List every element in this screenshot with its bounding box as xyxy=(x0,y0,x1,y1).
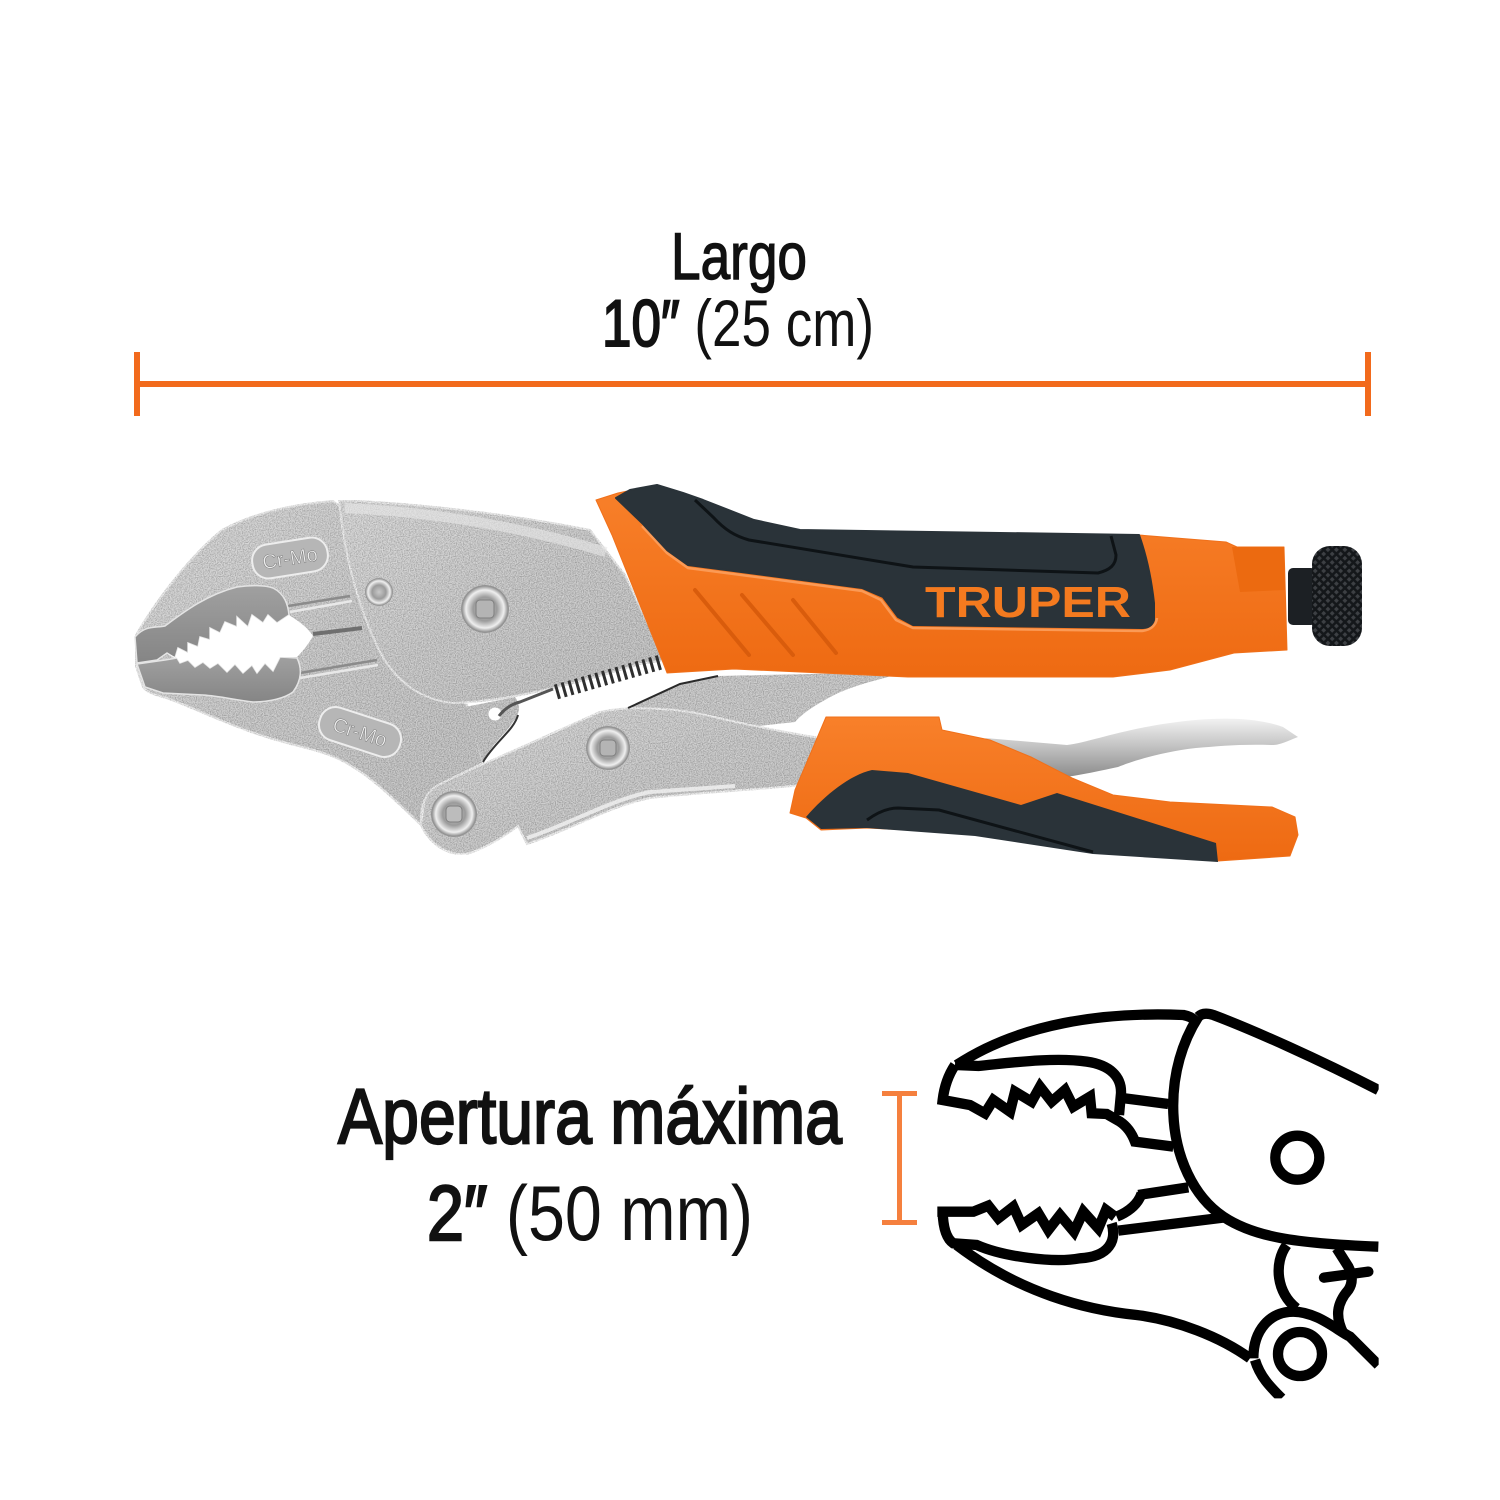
upper jaw insert xyxy=(135,586,289,663)
link dark edge xyxy=(483,715,518,762)
adjusting screw knob xyxy=(1288,546,1362,646)
handle groove line xyxy=(695,500,1116,573)
rivet: lever middle xyxy=(586,726,630,770)
orange handle body xyxy=(596,485,1287,677)
rear lever tip xyxy=(985,719,1298,778)
stamp: Cr-Mo lower xyxy=(315,703,405,761)
opening label xyxy=(338,1072,843,1257)
handle dark grip highlight rim xyxy=(642,526,1157,631)
orange lower grip xyxy=(790,717,1298,861)
lower jaw insert xyxy=(137,657,300,702)
lower grip xyxy=(790,717,1298,862)
jaw slide slots xyxy=(288,596,378,678)
length dimension line xyxy=(134,352,1371,416)
dark lower grip xyxy=(806,770,1218,862)
label: 2 inch (50 mm): 2″ (50 mm) xyxy=(427,1169,753,1257)
brand name: TRUPER xyxy=(925,578,1131,627)
product photo: locking pliers xyxy=(135,485,1362,862)
jaw frame xyxy=(135,501,483,825)
body plate highlight xyxy=(345,508,606,552)
stamp: Cr-Mo upper xyxy=(250,535,330,581)
opening dimension bracket xyxy=(882,1091,917,1225)
lower lever xyxy=(421,708,820,854)
icon: pliers jaw line drawing xyxy=(937,1014,1378,1398)
label: Largo: Largo xyxy=(671,219,807,293)
main handle xyxy=(596,485,1287,677)
lever lower highlight xyxy=(527,786,735,838)
jaw opening xyxy=(167,615,313,673)
lower grip groove xyxy=(867,808,1093,852)
wedge under handle xyxy=(628,672,905,728)
link eye hole xyxy=(488,708,502,720)
label: 10 inch (25 cm): 10″ (25 cm) xyxy=(602,286,874,360)
handle dark grip xyxy=(616,485,1154,628)
screw collar xyxy=(1288,568,1316,625)
upper body plate xyxy=(339,500,665,703)
handle collar shading xyxy=(1232,547,1285,592)
wedge dark edge xyxy=(628,676,718,708)
rivet: lever end xyxy=(431,791,477,837)
stamp: Cr-Mo lower: Cr-Mo xyxy=(330,714,390,752)
silver metal parts xyxy=(135,500,905,854)
knurled knob xyxy=(1312,546,1362,646)
rivet: upper pivot xyxy=(461,585,509,633)
handle ribs xyxy=(695,590,836,655)
plier link xyxy=(465,697,519,763)
spring xyxy=(499,660,668,716)
label: Apertura máxima: Apertura máxima xyxy=(338,1072,843,1160)
length label xyxy=(602,219,874,360)
stamp: Cr-Mo upper: Cr-Mo xyxy=(261,544,319,574)
rivet: small xyxy=(365,578,393,606)
